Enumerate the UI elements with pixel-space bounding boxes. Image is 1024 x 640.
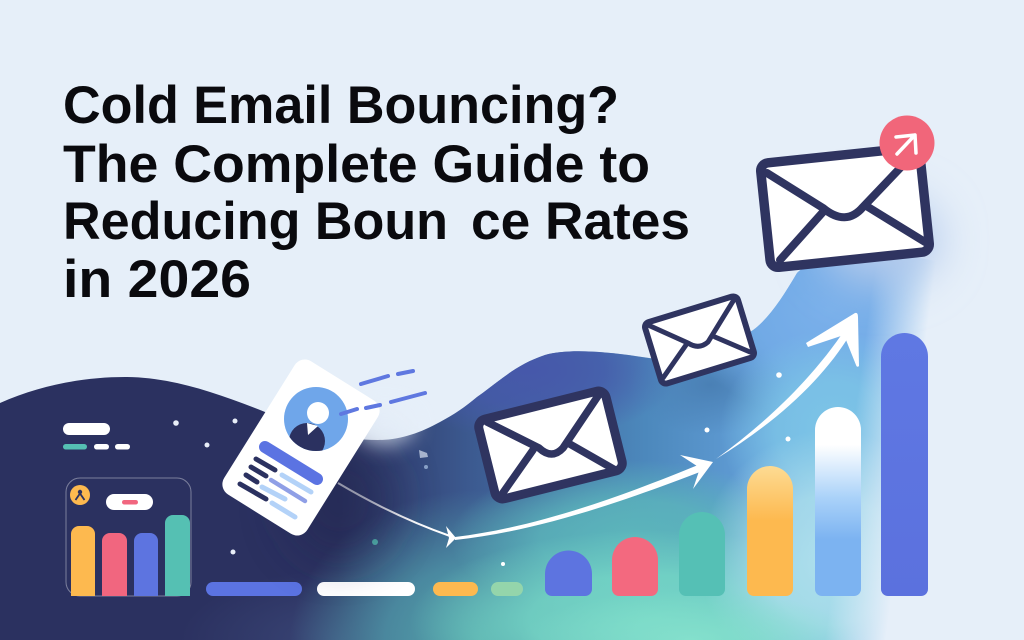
growth arrow: [338, 313, 859, 548]
badge: red arrow: [880, 116, 934, 170]
card text lines: [240, 447, 317, 517]
mini bars: [71, 515, 190, 596]
gradient wave landscape: [0, 258, 928, 640]
icon: orange avatar badge: [70, 485, 90, 505]
pale glow behind card: [355, 405, 415, 445]
title: The Complete Guide to: [63, 135, 650, 194]
sparkle dots: [173, 372, 790, 566]
title: in 2026: [63, 250, 251, 309]
title: [63, 76, 690, 309]
title: Reducing Boun: [63, 192, 448, 251]
icon: small envelope: [644, 295, 755, 385]
growth bar chart: [545, 333, 928, 596]
card shadow: [285, 440, 395, 560]
icon: avatar: [284, 387, 348, 451]
profile card: [218, 355, 384, 540]
icon: medium envelope: [477, 389, 624, 501]
soft glow behind large envelope: [820, 195, 940, 285]
mini bar chart panel: [66, 478, 191, 596]
title: Cold Email Bouncing?: [63, 76, 619, 135]
white label pill: [106, 494, 153, 510]
title: ce Rates: [471, 192, 690, 251]
motion dashes: [341, 371, 425, 414]
legend pills: [63, 423, 130, 450]
icon: large envelope: [760, 147, 930, 268]
pale fade at right edge: [780, 250, 1024, 640]
bottom bars row: [206, 582, 523, 596]
